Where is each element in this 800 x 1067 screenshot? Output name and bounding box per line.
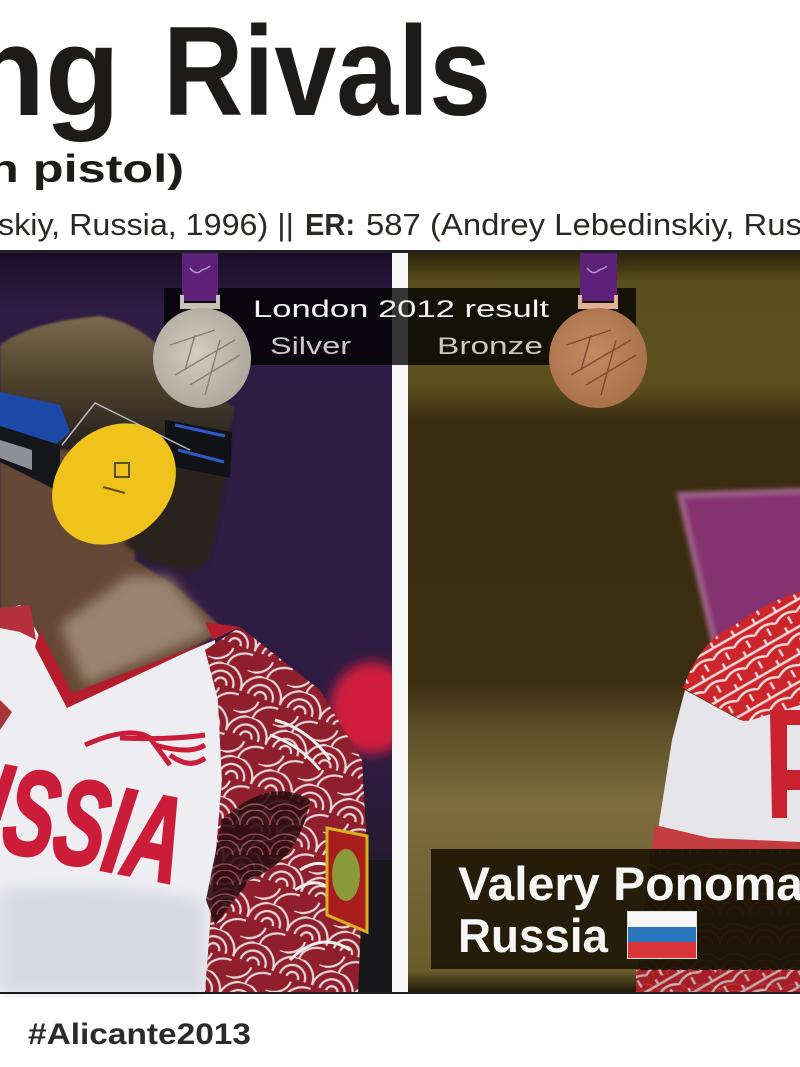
goggle strap (0, 426, 60, 492)
photo bottom rule (0, 992, 800, 994)
face and neck (0, 400, 225, 710)
top hair (0, 316, 235, 450)
blue headband (0, 392, 70, 450)
records line: skiy, Russia, 1996) || (0, 207, 294, 242)
records line: ER: (305, 207, 355, 242)
icon: russian flag (627, 911, 697, 959)
athlete country: Russia (458, 909, 609, 962)
records line (0, 207, 800, 242)
flag patch (327, 828, 367, 932)
collar (35, 622, 240, 708)
white shirt (0, 605, 222, 993)
lower right dark objects (350, 860, 392, 993)
bronze label: Bronze (437, 333, 543, 360)
shoulder trim (0, 605, 36, 640)
white shirt (655, 690, 800, 850)
icon: bronze medal (549, 253, 647, 408)
red background light (330, 662, 414, 754)
earmuff logo (103, 463, 129, 493)
result heading: London 2012 result (253, 296, 549, 323)
shirt letter (770, 710, 800, 818)
purple sign (680, 490, 800, 650)
silver label: Silver (270, 333, 351, 360)
panel: left athlete photo (0, 252, 414, 993)
dark sleeve folds (206, 791, 310, 925)
hashtag: #Alicante2013 (28, 1018, 251, 1051)
earmuff frame (62, 403, 190, 450)
patterned sleeve (205, 627, 366, 993)
records line: 587 (Andrey Lebedinskiy, Rus (366, 207, 800, 242)
red patterned shoulder (683, 592, 800, 722)
title second word: Rivals (163, 0, 491, 142)
left shirt emblem (0, 700, 12, 730)
shirt text swoosh (85, 733, 205, 765)
athlete name: Valery Ponoma (458, 857, 800, 910)
yellow earmuff (27, 398, 201, 570)
strap label (0, 440, 32, 470)
sleeve pale folds (270, 720, 350, 960)
back hair (125, 430, 232, 572)
dark patterned lower shirt (636, 850, 800, 993)
divider (392, 252, 408, 993)
panel: photo top rule (0, 250, 800, 253)
panel: result box (164, 288, 636, 365)
shirt shadow (0, 887, 205, 993)
panel: right athlete photo (408, 252, 800, 993)
icon: silver medal (153, 253, 251, 408)
athlete name box (431, 849, 800, 969)
sleeve band (650, 825, 800, 860)
strap blue lines (175, 425, 225, 462)
neck highlight (60, 575, 212, 685)
red hem (636, 970, 800, 993)
rear strap (165, 420, 232, 478)
